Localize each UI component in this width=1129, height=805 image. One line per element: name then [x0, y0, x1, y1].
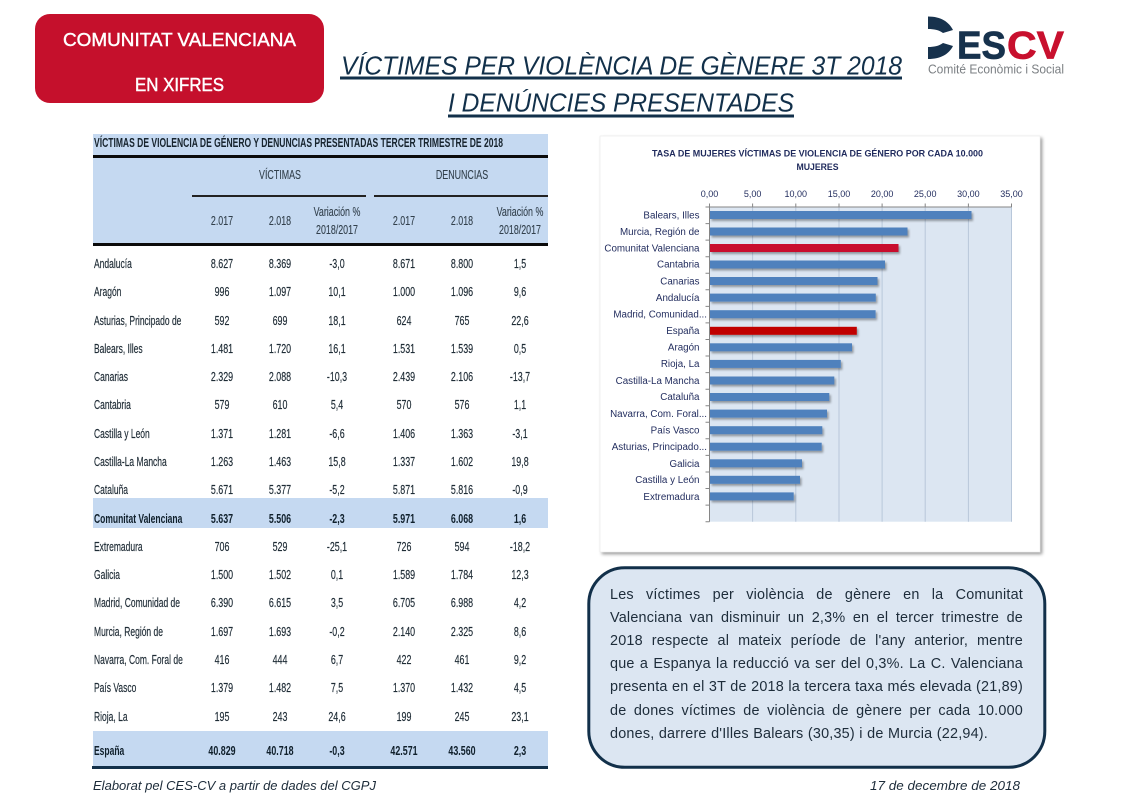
row: País Vasco: 1.432 — [450, 681, 473, 695]
column headers: 2018/2017 — [499, 223, 540, 237]
category labels: Cataluña — [660, 392, 700, 403]
title: I DENÚNCIES PRESENTADES — [448, 88, 795, 118]
horizontal axis with values: 5,00 — [744, 189, 761, 199]
row: Murcia: Murcia, Región de — [94, 625, 163, 639]
row: España: España — [94, 744, 124, 758]
row: Navarra: 461 — [454, 653, 469, 667]
row: España: -0,3 — [329, 744, 345, 758]
row: País Vasco: 1.379 — [211, 681, 233, 695]
row: Canarias: Canarias — [94, 370, 128, 384]
row: Castilla y León: 1.363 — [450, 427, 473, 441]
row: Galicia: 12,3 — [511, 568, 528, 582]
source note: Elaborat pel CES-CV a partir de dades del CGPJ — [93, 779, 377, 793]
row: Extremadura: 594 — [454, 540, 469, 554]
category labels — [604, 210, 707, 503]
callout text: presenta en el 3T de 2018 la tercera taxa més elevada (21,89) — [610, 679, 1023, 695]
row: España — [94, 744, 526, 758]
row: Murcia: 1.697 — [211, 625, 233, 639]
row: Cantabria: 570 — [397, 398, 411, 412]
row: Castilla-La Mancha: 19,8 — [511, 455, 528, 469]
row: Canarias: 2.106 — [450, 370, 473, 384]
row: Cataluña — [94, 483, 528, 497]
row: Extremadura — [94, 540, 530, 554]
row: Castilla-La Mancha: 15,8 — [328, 455, 346, 469]
row: Madrid: Madrid, Comunidad de — [94, 596, 180, 610]
horizontal axis with values: 35,00 — [1000, 189, 1023, 199]
row: País Vasco: 1.370 — [393, 681, 415, 695]
date: 17 de decembre de 2018 — [870, 779, 1020, 793]
row: Extremadura: 706 — [215, 540, 229, 554]
row: Extremadura: -25,1 — [327, 540, 347, 554]
row: Cantabria: 1,1 — [513, 398, 526, 412]
row: Andalucía: -3,0 — [329, 257, 345, 271]
callout text: de dones víctimes de violència de gènere per cada 10.000 — [610, 702, 1023, 718]
row: Castilla y León: Castilla y León — [94, 427, 150, 441]
row: Comunitat Valenciana: 5.637 — [211, 512, 233, 526]
row: Navarra: Navarra, Com. Foral de — [94, 653, 183, 667]
row: Comunitat Valenciana: 5.971 — [393, 512, 415, 526]
row: Andalucía: 8.671 — [393, 257, 415, 271]
row: Cantabria: 610 — [272, 398, 287, 412]
column headers: 2.017 — [211, 214, 233, 228]
category labels: Cantabria — [657, 260, 700, 270]
category labels: España — [666, 326, 700, 337]
row: Madrid: 6.390 — [211, 596, 233, 610]
callout: summary text — [587, 566, 1046, 769]
column headers: 2018/2017 — [316, 223, 358, 237]
row: Balears — [94, 342, 526, 356]
plot background and gridlines — [710, 207, 1012, 522]
category labels: Castilla-La Mancha — [616, 376, 700, 387]
row: Cataluña: Cataluña — [94, 483, 128, 497]
row: Castilla-La Mancha: 1.602 — [450, 455, 473, 469]
row: Murcia: 8,6 — [513, 625, 526, 639]
row: Cataluña: 5.377 — [268, 483, 291, 497]
row: Castilla y León: 1.371 — [211, 427, 233, 441]
category labels: Castilla y León — [635, 475, 700, 486]
callout text: Les víctimes per violència de gènere en la Comunitat — [610, 587, 1023, 603]
row: Madrid: 3,5 — [331, 596, 343, 610]
row: Asturias: 22,6 — [511, 314, 528, 328]
row: Murcia — [94, 625, 526, 639]
row: Andalucía: 8.800 — [450, 257, 473, 271]
column group header: denuncias: DENUNCIAS — [435, 168, 488, 182]
category labels: Andalucía — [656, 293, 700, 304]
row: Cantabria: 579 — [215, 398, 229, 412]
row: Murcia: 2.325 — [450, 625, 473, 639]
logo: CES CV — [928, 16, 1064, 76]
horizontal axis with values: 10,00 — [785, 189, 807, 199]
row: Castilla-La Mancha — [94, 455, 528, 469]
row: Cataluña: -0,9 — [512, 483, 527, 497]
row: Balears: 1.720 — [268, 342, 291, 356]
row: País Vasco — [94, 681, 526, 695]
column headers: 2.018 — [450, 214, 473, 228]
row: Cantabria: 576 — [454, 398, 469, 412]
row: Rioja: 245 — [454, 710, 469, 724]
category labels: Aragón — [668, 342, 700, 354]
callout text: 2018 respecte al mateix període de l'any anterior, mentre — [610, 633, 1023, 649]
row: Murcia: 2.140 — [393, 625, 415, 639]
column headers: 2.017 — [393, 214, 415, 228]
horizontal axis with values: 0,00 — [701, 189, 718, 199]
row: Canarias: 2.088 — [268, 370, 291, 384]
row: Aragón: 1.097 — [268, 285, 291, 299]
row: Balears: 1.539 — [450, 342, 473, 356]
logo: CES CV: ES — [957, 24, 1006, 68]
row: Navarra: 9,2 — [513, 653, 526, 667]
badge: Comunitat Valenciana en xifres: COMUNITAT VALENCIANA — [63, 29, 297, 50]
row: España: 43.560 — [448, 744, 475, 758]
row: Canarias: -13,7 — [509, 370, 530, 384]
row: Murcia: -0,2 — [329, 625, 345, 639]
row: Galicia: 0,1 — [331, 568, 343, 582]
row: Castilla-La Mancha: 1.337 — [393, 455, 415, 469]
row: Asturias: Asturias, Principado de — [94, 314, 181, 328]
row: Rioja: 199 — [397, 710, 411, 724]
title: VÍCTIMES PER VIOLÈNCIA DE GÈNERE 3T 2018 — [341, 50, 903, 80]
row: Cantabria: Cantabria — [94, 398, 131, 412]
row: Asturias: 765 — [454, 314, 469, 328]
horizontal axis with values: 25,00 — [914, 189, 936, 199]
row: Comunitat Valenciana: -2,3 — [329, 512, 345, 526]
chart panel background — [600, 136, 1040, 552]
row: Galicia: 1.500 — [211, 568, 233, 582]
row: Castilla y León: 1.406 — [393, 427, 415, 441]
row: Balears: 1.531 — [393, 342, 415, 356]
highlight band: España — [93, 731, 548, 766]
row: España: 2,3 — [513, 744, 526, 758]
chart title: MUJERES — [796, 162, 838, 172]
table column header band — [93, 158, 548, 243]
row: Comunitat Valenciana: 5.506 — [268, 512, 291, 526]
row: Cantabria: 5,4 — [331, 398, 343, 412]
bars — [710, 211, 972, 500]
row: Galicia — [94, 568, 528, 582]
row: Canarias: 2.329 — [211, 370, 233, 384]
row: Comunitat Valenciana — [94, 512, 526, 526]
row: Canarias: 2.439 — [393, 370, 415, 384]
row: Balears: 1.481 — [211, 342, 233, 356]
row: Navarra — [94, 653, 526, 667]
chart title — [652, 148, 983, 172]
row: Cataluña: 5.816 — [450, 483, 473, 497]
row: Extremadura: Extremadura — [94, 540, 143, 554]
row: Aragón: 1.096 — [450, 285, 473, 299]
row: Cataluña: -5,2 — [329, 483, 345, 497]
row: Asturias: 624 — [397, 314, 411, 328]
callout text: que a Espanya la reducció va ser del 0,3%. La C. Valenciana — [610, 656, 1023, 672]
row: Rioja — [94, 710, 528, 724]
logo: CES CV: Comité Econòmic i Social — [928, 62, 1064, 76]
row: Galicia: 1.502 — [268, 568, 291, 582]
category labels: Asturias, Principado... — [612, 442, 707, 453]
row: Madrid: 4,2 — [513, 596, 526, 610]
row: Galicia: 1.784 — [450, 568, 473, 582]
category labels: Canarias — [660, 276, 700, 288]
row: Balears: 0,5 — [513, 342, 526, 356]
row: Asturias: 592 — [215, 314, 229, 328]
horizontal axis with values: 15,00 — [828, 189, 850, 199]
row: Aragón — [94, 285, 526, 299]
horizontal axis with values: 30,00 — [957, 189, 980, 199]
row: Extremadura: 529 — [272, 540, 287, 554]
callout text: dones, darrere d'Illes Balears (30,35) i de Murcia (22,94). — [610, 726, 988, 742]
badge: Comunitat Valenciana en xifres: EN XIFRES — [135, 74, 224, 95]
logo: CES CV: CV — [1007, 24, 1064, 68]
column headers: Variación % — [314, 205, 360, 219]
row: Canarias — [94, 370, 530, 384]
row: Castilla y León: 1.281 — [268, 427, 291, 441]
row: Castilla-La Mancha: 1.463 — [268, 455, 291, 469]
row: País Vasco: 7,5 — [331, 681, 343, 695]
category labels: Rioja, La — [661, 359, 700, 370]
row: Comunitat Valenciana: 1,6 — [513, 512, 526, 526]
row: Navarra: 6,7 — [331, 653, 343, 667]
row: Madrid — [94, 596, 526, 610]
row: Aragón: Aragón — [94, 285, 121, 299]
category labels: Madrid, Comunidad... — [613, 310, 707, 320]
badge: Comunitat Valenciana en xifres — [35, 14, 324, 103]
row: Navarra: 444 — [272, 653, 287, 667]
row: Comunitat Valenciana: Comunitat Valenciana — [94, 512, 182, 526]
row: Rioja: 195 — [215, 710, 229, 724]
row: España: 40.829 — [208, 744, 236, 758]
row: Extremadura: -18,2 — [509, 540, 530, 554]
row: Navarra: 416 — [215, 653, 229, 667]
row: Galicia: Galicia — [94, 568, 120, 582]
row: Castilla y León: -3,1 — [512, 427, 527, 441]
row: Madrid: 6.988 — [450, 596, 473, 610]
category labels: Murcia, Región de — [620, 227, 700, 238]
column headers — [211, 205, 544, 237]
column headers: 2.018 — [268, 214, 291, 228]
row: Rioja: 24,6 — [328, 710, 346, 724]
row: Balears: 16,1 — [328, 342, 346, 356]
row: Andalucía: Andalucía — [94, 257, 132, 271]
row: Madrid: 6.705 — [393, 596, 415, 610]
category labels: Balears, Illes — [643, 210, 700, 222]
callout text — [610, 587, 1023, 742]
row: España: 40.718 — [266, 744, 293, 758]
horizontal axis with values: 20,00 — [871, 189, 893, 199]
row: Aragón: 9,6 — [513, 285, 526, 299]
row: Aragón: 10,1 — [328, 285, 346, 299]
table title band — [93, 134, 548, 155]
row: Cataluña: 5.871 — [393, 483, 415, 497]
row: Andalucía: 8.627 — [211, 257, 233, 271]
title — [340, 50, 903, 118]
column headers: Variación % — [496, 205, 543, 219]
row: Castilla y León — [94, 427, 528, 441]
horizontal axis with values — [701, 189, 1023, 207]
row: Aragón: 996 — [215, 285, 229, 299]
row: Cataluña: 5.671 — [211, 483, 233, 497]
row: Comunitat Valenciana: 6.068 — [450, 512, 473, 526]
category labels: Extremadura — [643, 492, 700, 503]
row: Aragón: 1.000 — [393, 285, 415, 299]
category labels: Galicia — [670, 459, 700, 470]
row: Andalucía — [94, 257, 526, 271]
row: País Vasco: País Vasco — [94, 681, 136, 695]
row: País Vasco: 4,5 — [513, 681, 526, 695]
row: Andalucía: 8.369 — [268, 257, 291, 271]
column group header: víctimas: VÍCTIMAS — [259, 168, 300, 182]
row: Navarra: 422 — [397, 653, 411, 667]
vertical axis line and ticks — [706, 207, 710, 522]
row: Madrid: 6.615 — [268, 596, 291, 610]
highlight band: Comunitat Valenciana — [93, 498, 548, 528]
row: Castilla-La Mancha: Castilla-La Mancha — [94, 455, 167, 469]
row: Extremadura: 726 — [397, 540, 411, 554]
row: Cantabria — [94, 398, 526, 412]
row: España: 42.571 — [390, 744, 418, 758]
row: Castilla-La Mancha: 1.263 — [211, 455, 233, 469]
panel: bar chart of victim rate per 10.000 women — [600, 136, 1044, 556]
callout text: Valenciana van disminuir un 2,3% en el tercer trimestre de — [610, 610, 1023, 626]
row: Andalucía: 1,5 — [513, 257, 526, 271]
category labels: Navarra, Com. Foral... — [610, 409, 707, 420]
row: Rioja: Rioja, La — [94, 710, 128, 724]
row: Galicia: 1.589 — [393, 568, 415, 582]
row: Murcia: 1.693 — [268, 625, 291, 639]
row: Castilla y León: -6,6 — [329, 427, 345, 441]
row: Canarias: -10,3 — [327, 370, 347, 384]
row: Rioja: 243 — [272, 710, 287, 724]
row: Rioja: 23,1 — [511, 710, 528, 724]
row: Balears: Balears, Illes — [94, 342, 143, 356]
row: Asturias — [94, 314, 528, 328]
category labels: Comunitat Valenciana — [604, 244, 700, 254]
chart title: TASA DE MUJERES VÍCTIMAS DE VIOLENCIA DE GÉNERO POR CADA 10.000 — [652, 148, 983, 158]
row: Asturias: 18,1 — [328, 314, 346, 328]
row: País Vasco: 1.482 — [268, 681, 291, 695]
category labels: País Vasco — [651, 426, 700, 436]
row: Asturias: 699 — [272, 314, 287, 328]
